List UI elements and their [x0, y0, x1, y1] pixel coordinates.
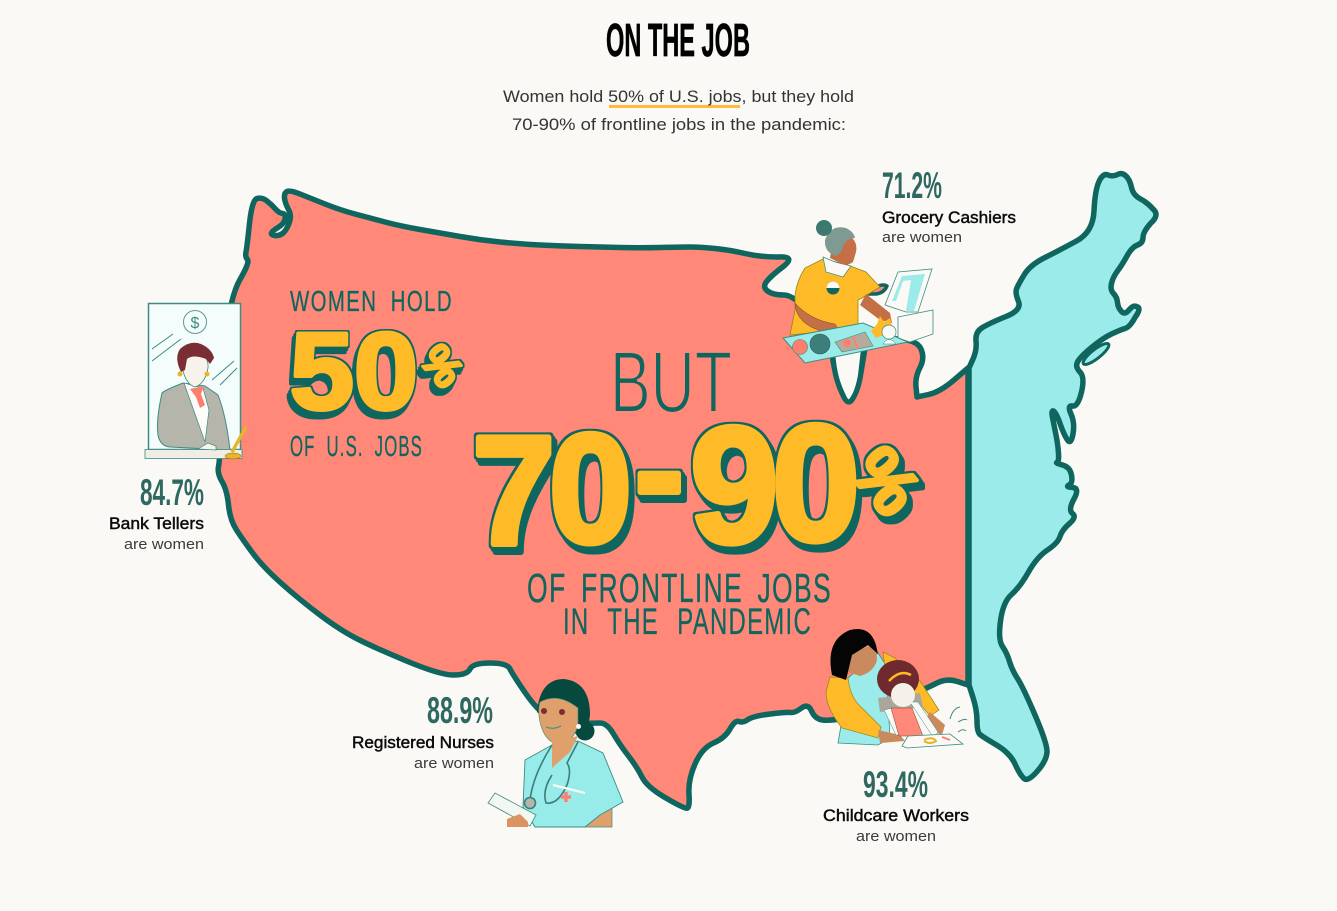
pocket with red cross	[553, 785, 585, 802]
drawing paper	[902, 734, 963, 748]
number: 70-90%: 70-	[472, 383, 684, 578]
checkout belt	[783, 323, 908, 363]
nurse scrubs	[523, 741, 623, 827]
map: Lake Michigan	[832, 345, 864, 402]
callout: but 70-90% of frontline jobs	[472, 334, 936, 642]
cashier badge	[826, 282, 840, 294]
cash register base	[898, 310, 933, 342]
cash register screen	[885, 269, 932, 312]
nurse hand	[507, 814, 528, 827]
illustration: registered nurse	[488, 679, 623, 827]
stat: bank tellers: are women	[124, 537, 204, 553]
caregiver hands	[878, 730, 905, 743]
subtitle text	[503, 87, 854, 134]
teller scarf	[190, 386, 205, 408]
cashier shirt	[790, 259, 880, 335]
stat: registered nurses: Registered Nurses	[352, 734, 494, 752]
counter	[145, 450, 242, 458]
clipboard tablet	[488, 793, 536, 826]
cashier arms	[795, 303, 842, 335]
nurse hair	[537, 679, 590, 735]
caregiver hair	[830, 629, 878, 680]
caregiver right sleeve	[883, 652, 939, 716]
child hair	[877, 660, 919, 698]
stat: childcare workers	[823, 764, 969, 845]
number: 70-90%: %	[836, 432, 936, 530]
highlight underline	[609, 105, 740, 108]
number: 50%: %	[410, 336, 473, 397]
map of the United States	[218, 174, 1156, 808]
price burst	[871, 316, 892, 338]
number: 70-90%: 90	[690, 392, 860, 578]
stat: grocery cashiers	[882, 165, 1016, 246]
subtitle text: 70-90% of frontline jobs in the pandemic:	[512, 115, 846, 134]
stat: registered nurses: are women	[414, 756, 494, 772]
teller hand	[198, 443, 216, 450]
crayon drawing	[924, 737, 950, 743]
teller shirt	[184, 383, 209, 442]
map: eastern blue region	[969, 174, 1156, 779]
caregiver face	[848, 645, 877, 676]
cashier hair	[816, 220, 855, 256]
stat: childcare workers: 93.4%	[863, 764, 928, 805]
stat: bank tellers	[109, 472, 204, 553]
illustration: childcare worker with child	[826, 629, 967, 748]
number: 70-90%	[472, 383, 936, 578]
number: 50%: 50	[290, 310, 418, 432]
teller hair	[177, 343, 214, 372]
nurse hair bun	[576, 722, 594, 740]
doodle sprigs	[950, 707, 967, 732]
child pinafore	[891, 708, 923, 736]
icon: dollar sign: $	[191, 315, 200, 332]
nurse earring	[576, 724, 581, 729]
caregiver left sleeve	[826, 677, 881, 738]
title: ON THE JOB	[606, 14, 750, 66]
cashier collar	[823, 257, 851, 277]
subtitle text: Women hold 50% of U.S. jobs, but they hold	[503, 87, 854, 106]
teller jacket	[158, 383, 230, 450]
stat: grocery cashiers: 71.2%	[882, 165, 942, 206]
stat: bank tellers: 84.7%	[140, 472, 204, 513]
nurse eyes and mouth	[541, 708, 565, 728]
icon: dollar sign	[184, 310, 206, 334]
stat: childcare workers: Childcare Workers	[823, 807, 969, 825]
stat: grocery cashiers: are women	[882, 230, 962, 246]
scanner globe	[882, 325, 896, 344]
label: of U.S. jobs: OF U.S. JOBS	[290, 431, 423, 463]
stat: registered nurses	[352, 690, 494, 772]
callout: women hold 50% of U.S. jobs	[290, 286, 473, 463]
stethoscope	[524, 742, 578, 808]
stat: registered nurses: 88.9%	[427, 690, 493, 731]
map: Long Island	[1081, 341, 1111, 367]
stat: grocery cashiers: Grocery Cashiers	[882, 209, 1016, 227]
child face	[891, 683, 915, 707]
label: in the pandemic: IN THE PANDEMIC	[563, 601, 812, 642]
word: but: BUT	[610, 334, 732, 431]
stat: childcare workers: are women	[856, 829, 936, 845]
child arms	[884, 702, 938, 737]
label: of frontline jobs: OF FRONTLINE JOBS	[527, 565, 832, 611]
stat: bank tellers: Bank Tellers	[109, 515, 204, 533]
illustration: bank teller in a window	[145, 304, 250, 459]
label: women hold: WOMEN HOLD	[290, 286, 453, 318]
white backdrop under figures	[838, 693, 950, 742]
cashier head	[830, 236, 856, 265]
map: upper Michigan	[866, 285, 887, 294]
child shirt	[878, 693, 923, 712]
illustration: grocery cashier	[783, 220, 933, 363]
teller window	[148, 304, 240, 450]
teller earrings	[178, 372, 182, 376]
pen on chain	[225, 427, 250, 459]
cabbage	[810, 334, 830, 354]
apple	[792, 340, 808, 354]
teller neck and face	[182, 352, 208, 387]
nurse arm	[572, 805, 612, 827]
child headband	[889, 673, 911, 681]
package	[835, 332, 873, 352]
map: main coral region	[218, 191, 968, 808]
caregiver apron	[838, 653, 890, 745]
nurse neck and face	[539, 698, 578, 744]
